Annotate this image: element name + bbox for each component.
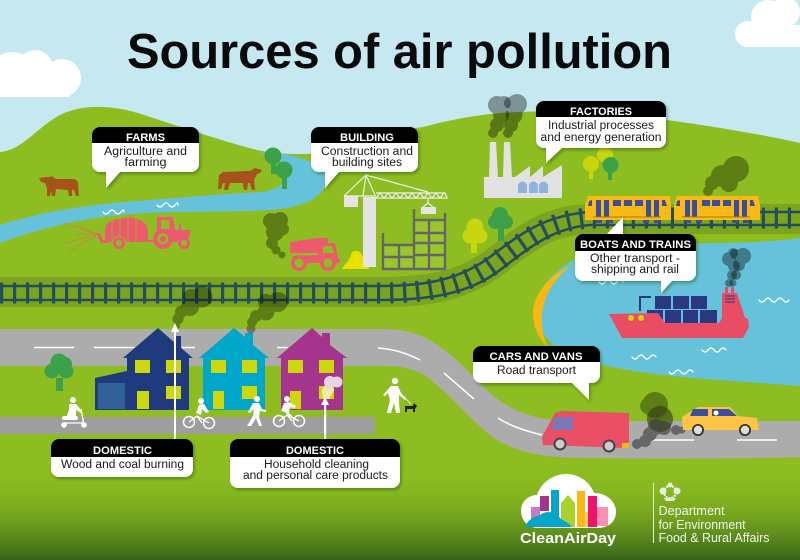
callout: cars and vans — [473, 346, 600, 400]
spray — [62, 222, 96, 252]
smoke: dump truck — [263, 212, 289, 258]
callout: cars and vans: Road transport — [497, 365, 577, 377]
smoke: factory — [488, 94, 527, 138]
logo: Clean Air Day — [520, 474, 617, 547]
callout: building: BUILDING — [340, 132, 394, 144]
arrow: household products — [321, 397, 329, 440]
icon: dump truck — [290, 238, 340, 271]
icon: container ship — [609, 287, 749, 338]
icon: cow right — [218, 168, 262, 190]
lake ripples — [599, 280, 789, 374]
cycle path — [0, 417, 375, 434]
river ripples — [103, 203, 178, 214]
icon: cyclist two — [274, 396, 304, 426]
building under construction — [382, 209, 446, 270]
logo: Clean Air Day: CleanAirDay — [520, 530, 617, 547]
road markings — [34, 348, 777, 440]
icon: cyclist one — [184, 398, 214, 428]
divider and Defra logo — [653, 482, 770, 545]
sand — [533, 265, 572, 347]
cloud: top right — [735, 0, 800, 47]
cloud: top left — [0, 50, 81, 97]
icon: trees by river — [264, 148, 292, 189]
callout: domestic wood and coal: Wood and coal burning — [61, 459, 184, 471]
callout: domestic household products: and personal care products — [243, 470, 388, 482]
callout: factories — [536, 101, 666, 163]
callout: boats and trains: BOATS AND TRAINS — [580, 239, 691, 251]
field band under railway — [0, 219, 800, 292]
callout: domestic household products — [230, 439, 400, 488]
callout: farms — [92, 127, 199, 188]
icon: dog walker — [383, 378, 417, 413]
icon: yellow car — [682, 407, 759, 436]
tree by road — [44, 354, 74, 391]
callout: domestic wood and coal: DOMESTIC — [93, 445, 152, 457]
icon: red van — [542, 411, 629, 452]
household product spray — [322, 376, 342, 399]
railway — [0, 212, 800, 300]
callout: farms: Agriculture and — [104, 146, 187, 158]
divider and Defra logo: Department — [658, 503, 725, 518]
smoke: ship — [722, 248, 751, 287]
callout: domestic household products: Household cleaning — [264, 459, 369, 471]
ground gradient — [0, 465, 800, 560]
divider and Defra logo: for Environment — [658, 517, 746, 532]
trees near building — [462, 207, 513, 253]
callout: domestic household products: DOMESTIC — [286, 445, 344, 457]
house: cyan — [199, 328, 269, 410]
callout: farms: farming — [124, 157, 166, 169]
callout: factories: FACTORIES — [570, 106, 632, 118]
icon: sand pile — [342, 251, 369, 269]
icon: cow left — [39, 176, 79, 196]
callout: building: Construction and — [321, 146, 413, 158]
callout: factories: and energy generation — [540, 132, 662, 144]
callout: boats and trains — [575, 217, 696, 293]
smoke: train — [703, 156, 749, 196]
icon: pedestrian — [247, 396, 266, 426]
smoke: cyan house chimney — [246, 292, 288, 334]
icon: tractor and sprayer — [62, 217, 191, 252]
callout: boats and trains: shipping and rail — [591, 264, 679, 276]
house: purple — [277, 328, 347, 410]
trees near factory — [583, 147, 618, 180]
main road — [0, 329, 800, 459]
callout: building: building sites — [332, 157, 402, 169]
callout: building — [311, 127, 418, 188]
callout: farms: FARMS — [126, 132, 165, 144]
divider and Defra logo: Food & Rural Affairs — [658, 530, 770, 545]
callout: domestic wood and coal — [51, 439, 193, 477]
icon: scooter rider — [61, 397, 87, 428]
smoke: blue house chimney — [172, 286, 212, 329]
house: blue — [95, 328, 193, 410]
icon: factory — [484, 142, 562, 198]
callout: factories: Industrial processes — [548, 120, 654, 132]
smoke: van exhaust — [632, 392, 686, 449]
icon: crane — [344, 175, 447, 267]
icon: train — [585, 196, 760, 223]
lake — [537, 238, 800, 386]
callout: boats and trains: Other transport - — [590, 253, 680, 265]
title: Sources of air pollution — [127, 25, 672, 79]
callout: cars and vans: CARS AND VANS — [490, 351, 582, 363]
river — [0, 152, 326, 243]
arrow: wood and coal — [171, 323, 179, 440]
